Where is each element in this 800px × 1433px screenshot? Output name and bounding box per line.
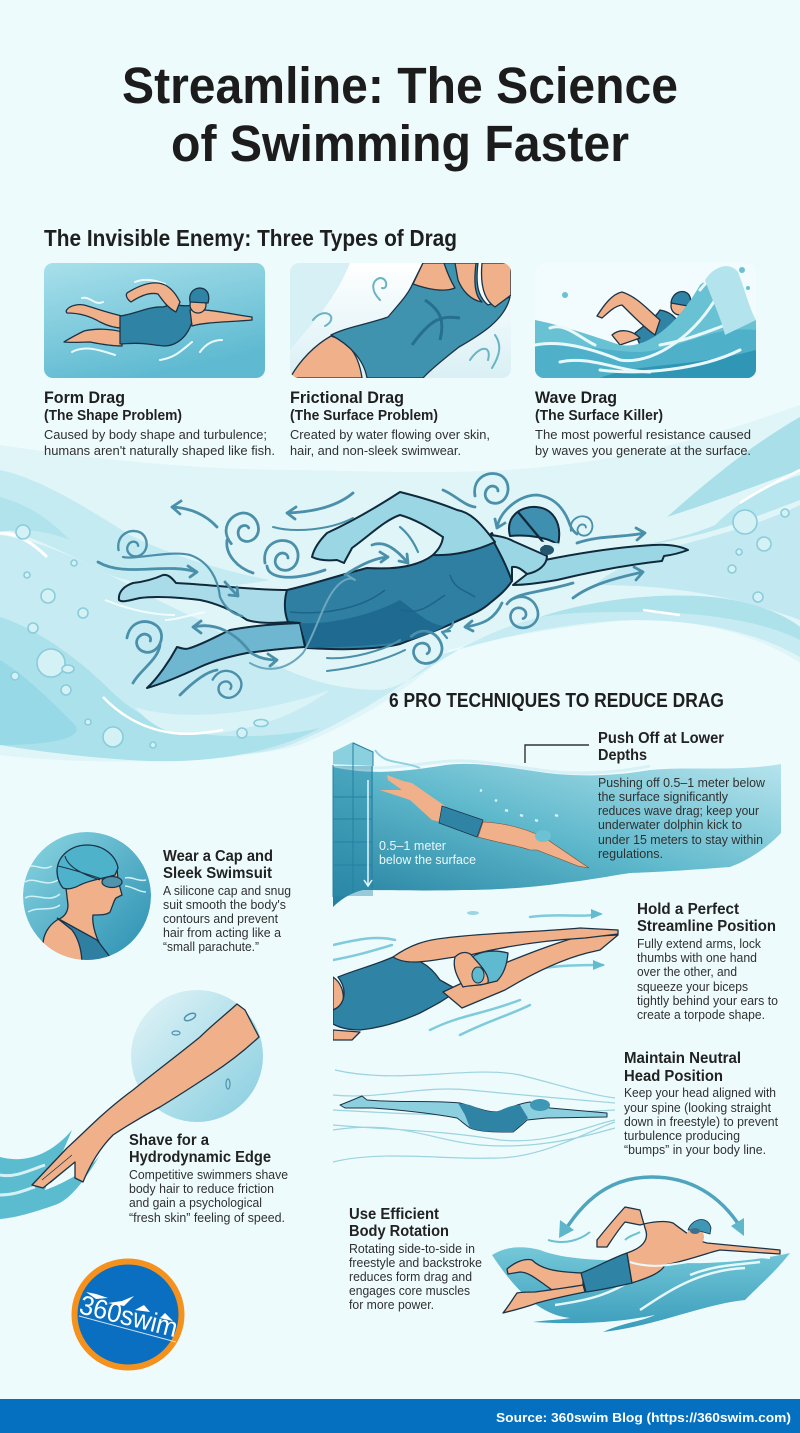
text: push off: under 15 meters to stay within: [598, 832, 763, 847]
swimmer figure: [119, 492, 688, 688]
illustration: neutral swimmer with flow lines: [333, 1070, 615, 1162]
label: form drag: humans aren't naturally shaped like fish.: [44, 443, 275, 458]
text: body rotation: reduces form drag and: [349, 1269, 472, 1284]
text: shave: Shave for a: [129, 1132, 209, 1149]
illustration: frictional drag swimsuit: [290, 263, 511, 378]
label: wave drag: Wave Drag: [535, 388, 617, 407]
footer bar: [0, 1399, 800, 1433]
drag swirls and flow arrows: [98, 474, 645, 702]
title: of Swimming Faster: [171, 115, 629, 172]
text: push off: [598, 730, 766, 861]
text: shave: Hydrodynamic Edge: [129, 1149, 271, 1166]
label: form drag: [44, 388, 275, 458]
callout line: [525, 745, 589, 763]
text: streamline: tightly behind your ears to: [637, 993, 778, 1008]
label: frictional drag: (The Surface Problem): [290, 408, 438, 424]
title: [122, 57, 678, 172]
text: body rotation: Rotating side-to-side in: [349, 1241, 475, 1256]
text: cap and swimsuit: “small parachute.”: [163, 939, 259, 954]
technique: neutral head position: [333, 1050, 778, 1162]
illustration: underwater push off: [333, 742, 781, 907]
panel: wave drag: [535, 263, 756, 458]
logo: 360swim: [74, 1262, 182, 1368]
text: streamline: Hold a Perfect: [637, 901, 740, 918]
text: shave: Competitive swimmers shave: [129, 1167, 288, 1182]
central swimmer with drag swirls: [98, 474, 688, 702]
label: wave drag: (The Surface Killer): [535, 408, 663, 424]
illustration: rotating swimmer: [492, 1177, 790, 1332]
illustration: streamline arms: [333, 909, 618, 1040]
text: cap and swimsuit: hair from acting like a: [163, 925, 282, 940]
text: shave: [129, 1132, 288, 1225]
text: streamline: Fully extend arms, lock: [637, 936, 762, 951]
background waves: [0, 405, 800, 762]
text: cap and swimsuit: Sleek Swimsuit: [163, 865, 273, 882]
text: streamline: over the other, and: [637, 964, 737, 979]
text: streamline: Streamline Position: [637, 918, 776, 935]
text: shave: “fresh skin” feeling of speed.: [129, 1210, 285, 1225]
label: form drag: Form Drag: [44, 388, 125, 407]
text: cap and swimsuit: A silicone cap and snug: [163, 883, 291, 898]
text: shave: body hair to reduce friction: [129, 1181, 274, 1196]
depth label: [379, 838, 476, 867]
title: Streamline: The Science: [122, 57, 678, 114]
text: neutral head: Keep your head aligned with: [624, 1085, 776, 1100]
text: push off: Pushing off 0.5–1 meter below: [598, 775, 766, 790]
text: neutral head: “bumps” in your body line.: [624, 1142, 766, 1157]
technique: perfect streamline position: [333, 901, 778, 1040]
text: streamline: squeeze your biceps: [637, 979, 748, 994]
text: neutral head: Head Position: [624, 1068, 723, 1085]
illustration: form drag swimmer: [44, 263, 265, 378]
text: push off: Depths: [598, 747, 647, 764]
text: body rotation: Use Efficient: [349, 1206, 440, 1223]
label: wave drag: [535, 388, 751, 458]
text: body rotation: [349, 1206, 482, 1312]
depth label: below the surface: [379, 852, 476, 867]
label: frictional drag: Frictional Drag: [290, 388, 404, 407]
technique: push off at lower depths: [333, 730, 781, 907]
text: neutral head: turbulence producing: [624, 1128, 740, 1143]
illustration: shaved arm with water: [0, 990, 263, 1219]
technique: efficient body rotation: [349, 1177, 790, 1332]
text: cap and swimsuit: suit smooth the body's: [163, 897, 286, 912]
text: body rotation: freestyle and backstroke: [349, 1255, 482, 1270]
text: body rotation: engages core muscles: [349, 1283, 470, 1298]
text: cap and swimsuit: contours and prevent: [163, 911, 278, 926]
text: shave: and gain a psychological: [129, 1195, 262, 1210]
section heading: three types of drag: The Invisible Enemy: Three Types of Drag: [44, 225, 457, 251]
text: streamline: [637, 901, 778, 1022]
bubbles: [11, 509, 789, 748]
text: body rotation: for more power.: [349, 1297, 434, 1312]
label: wave drag: The most powerful resistance caused: [535, 427, 751, 442]
label: frictional drag: [290, 388, 490, 458]
label: form drag: Caused by body shape and turbulence;: [44, 427, 267, 442]
technique: shave for a hydrodynamic edge: [0, 990, 288, 1225]
text: neutral head: Maintain Neutral: [624, 1050, 741, 1067]
illustration: swimmer head in circle: [23, 832, 151, 966]
label: form drag: (The Shape Problem): [44, 408, 182, 424]
text: push off: reduces wave drag; keep your: [598, 803, 760, 818]
text: streamline: thumbs with one hand: [637, 950, 757, 965]
logo: 360swim: 360swim: [77, 1290, 181, 1343]
text: push off: Push Off at Lower: [598, 730, 724, 747]
text: cap and swimsuit: Wear a Cap and: [163, 848, 273, 865]
panel: form drag: [44, 263, 275, 458]
label: frictional drag: Created by water flowing over skin,: [290, 427, 490, 442]
section heading: six techniques: 6 PRO TECHNIQUES TO REDUCE DRAG: [389, 690, 724, 712]
label: wave drag: by waves you generate at the surface.: [535, 443, 751, 458]
depth label: 0.5–1 meter: [379, 838, 447, 853]
text: push off: regulations.: [598, 846, 663, 861]
text: cap and swimsuit: [163, 848, 291, 954]
text: neutral head: down in freestyle) to prevent: [624, 1114, 778, 1129]
text: push off: the surface significantly: [598, 789, 729, 804]
text: neutral head: [624, 1050, 778, 1157]
text: streamline: create a torpode shape.: [637, 1007, 765, 1022]
text: neutral head: your spine (looking straight: [624, 1100, 771, 1115]
footer bar: Source: 360swim Blog (https://360swim.com): [496, 1410, 791, 1425]
technique: wear a cap and sleek swimsuit: [23, 832, 291, 966]
label: frictional drag: hair, and non-sleek swimwear.: [290, 443, 461, 458]
text: body rotation: Body Rotation: [349, 1223, 449, 1240]
text: push off: underwater dolphin kick to: [598, 817, 742, 832]
panel: frictional drag: [290, 263, 511, 458]
illustration: wave drag swimmer: [535, 263, 756, 378]
